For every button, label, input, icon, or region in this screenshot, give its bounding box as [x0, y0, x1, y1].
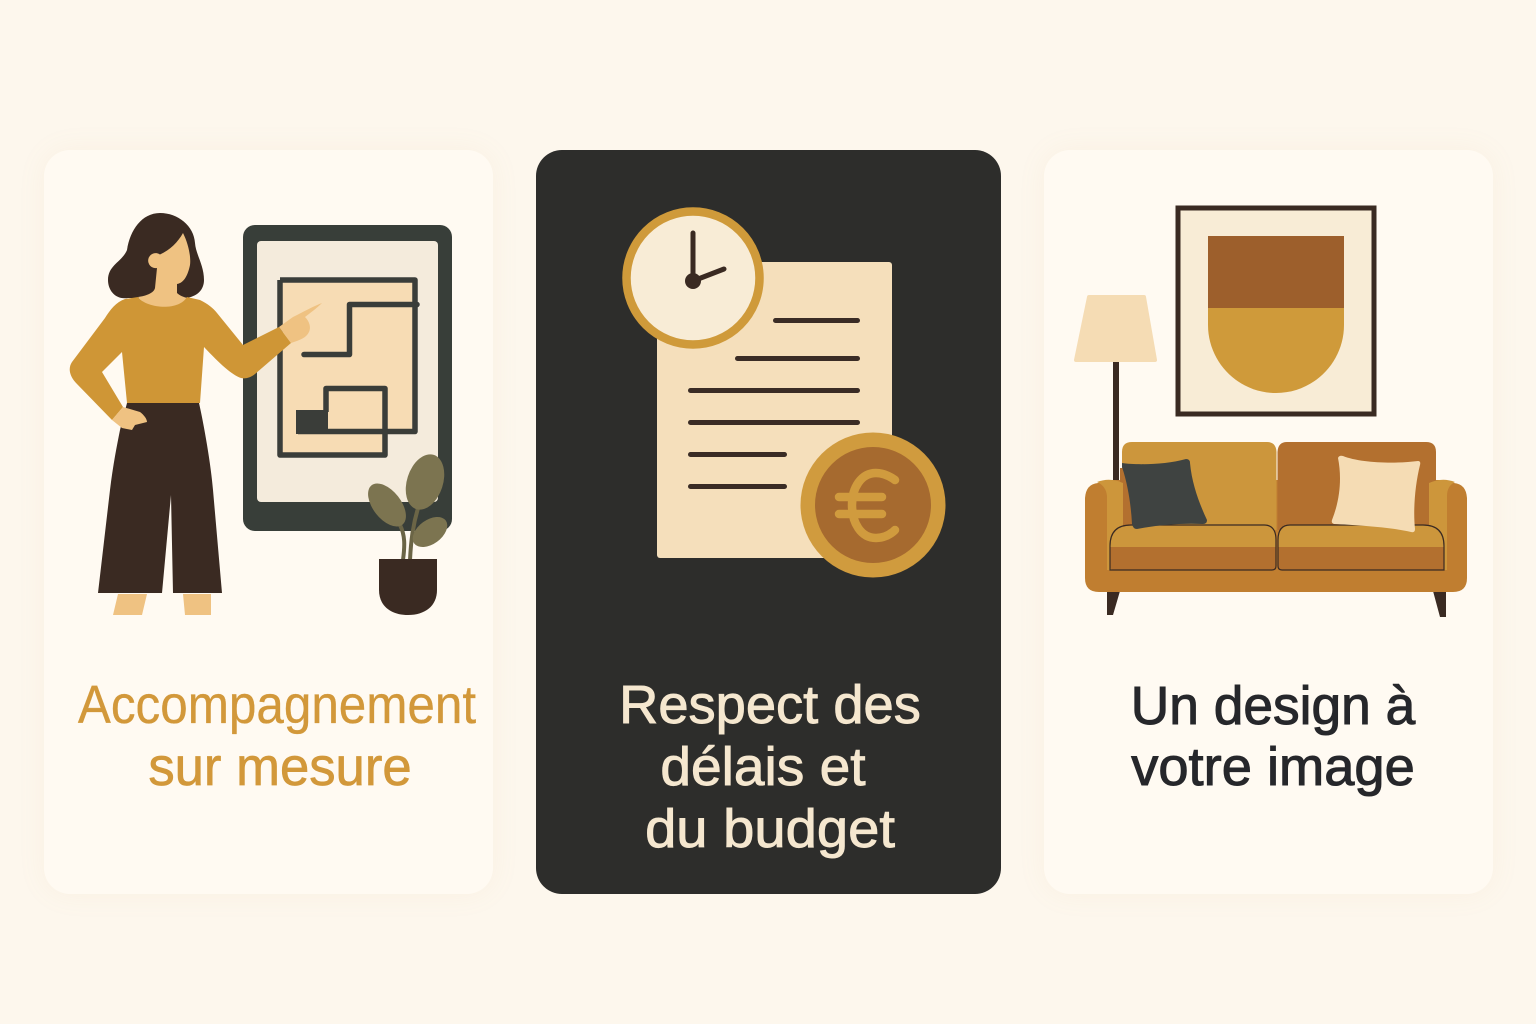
icon: euro coin — [800, 432, 946, 578]
icon: clock — [626, 212, 760, 344]
illustration: sofa, lamp and framed art — [1076, 208, 1467, 617]
illustration: document, clock and euro coin — [626, 212, 946, 578]
heading: accompagnement sur mesure: Accompagnement — [77, 675, 476, 735]
heading: respect des délais et du budget — [619, 675, 921, 859]
figure: woman — [70, 213, 322, 615]
icon: tablet with floor plan — [243, 225, 452, 531]
icon: floor lamp — [1076, 297, 1155, 485]
heading: accompagnement sur mesure — [77, 675, 476, 797]
panel: design — [1044, 150, 1493, 894]
icon: document — [657, 262, 892, 558]
panel: accompagnement — [44, 150, 493, 894]
heading: un design à votre image: Un design à — [1130, 676, 1415, 736]
icon: framed art — [1178, 208, 1374, 414]
heading: respect des délais et du budget: délais et — [660, 737, 866, 797]
panel: délais et budget — [536, 150, 1001, 894]
heading: accompagnement sur mesure: sur mesure — [148, 737, 411, 797]
icon: potted plant — [361, 449, 453, 615]
icon: sofa — [1085, 442, 1467, 617]
heading: un design à votre image — [1130, 676, 1416, 797]
heading: respect des délais et du budget: du budget — [645, 799, 895, 859]
heading: un design à votre image: votre image — [1131, 737, 1415, 797]
heading: respect des délais et du budget: Respect des — [619, 675, 921, 735]
